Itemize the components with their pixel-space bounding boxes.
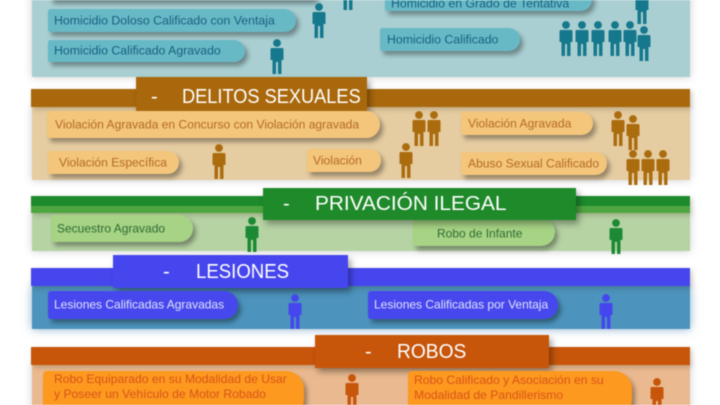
bar: privación ilegal	[31, 196, 690, 213]
heading: robos: -	[365, 340, 372, 362]
pill: Robo de Infante	[413, 218, 555, 246]
bar: lesiones	[31, 268, 690, 286]
pill: Lesiones Calificadas Agravadas	[48, 291, 238, 319]
bar: delitos sexuales	[31, 89, 690, 107]
heading: lesiones: -	[163, 260, 170, 282]
icons: homicidios people	[270, 0, 652, 75]
pill: Robo Calificado: Robo Calificado y Asociación en su	[414, 373, 604, 387]
heading: delitos sexuales: -	[151, 86, 158, 108]
panel: privación ilegal	[32, 212, 690, 251]
pill: Robo Calificado	[408, 371, 632, 405]
pill: Homicidio Calificado	[380, 28, 520, 51]
panel: homicidios	[32, 0, 690, 77]
pill: Violación Agravada en Concurso: Violación Agravada en Concurso con Violación agravada	[55, 117, 359, 131]
pill: Homicidio Calificado Agravado: Homicidio Calificado Agravado	[54, 44, 221, 58]
heading: lesiones: LESIONES	[196, 260, 289, 282]
pill: Violación Agravada: Violación Agravada	[468, 116, 571, 130]
pill: Lesiones Calificadas por Ventaja: Lesiones Calificadas por Ventaja	[374, 298, 548, 312]
pill: Violación: Violación	[313, 153, 362, 167]
pill: Robo Equiparado: Robo Equiparado en su Modalidad de Usar	[54, 372, 287, 386]
pill: Homicidio Doloso Calificado con Ventaja	[48, 9, 296, 32]
pill: Homicidio Doloso Calificado con Ventaja: Homicidio Doloso Calificado con Ventaja	[54, 13, 275, 27]
pill: Homicidio Calificado Agravado	[48, 40, 245, 62]
heading: robos: ROBOS	[397, 340, 466, 362]
pill: Abuso Sexual Calificado	[461, 152, 607, 175]
panel: lesiones	[32, 286, 690, 329]
pill: Abuso Sexual Calificado: Abuso Sexual Calificado	[468, 156, 599, 170]
pill: Secuestro Agravado	[51, 215, 193, 242]
pill: Lesiones Calificadas por Ventaja	[368, 291, 558, 319]
pill: Lesiones Calificadas Agravadas: Lesiones Calificadas Agravadas	[54, 298, 224, 312]
pill: Violación Específica	[48, 151, 179, 174]
icons: delitos sexuales people	[212, 110, 670, 186]
pill: Robo Equiparado: y Poseer un Vehículo de Motor Robado	[54, 387, 266, 401]
pill: Homicidio Calificado: Homicidio Calificado	[387, 32, 498, 46]
icons: robos people	[344, 374, 664, 405]
heading: delitos sexuales	[136, 77, 367, 114]
pill: Violación Agravada	[461, 112, 593, 135]
pill: Secuestro Agravado: Secuestro Agravado	[57, 221, 165, 235]
icons: privación ilegal people	[244, 216, 624, 255]
panel: delitos sexuales	[32, 107, 690, 180]
pill: Robo de Infante: Robo de Infante	[437, 226, 522, 240]
pill: Violación Agravada en Concurso	[47, 111, 380, 138]
pill: Robo Equiparado	[43, 371, 304, 405]
heading: lesiones	[113, 255, 348, 288]
bar: robos	[31, 347, 690, 365]
heading: robos	[315, 335, 549, 368]
panel: robos	[32, 364, 690, 405]
heading: privación ilegal	[263, 188, 576, 220]
heading: privación ilegal: -	[283, 193, 290, 215]
pill: Violación Específica: Violación Específica	[59, 155, 167, 169]
heading: privación ilegal: PRIVACIÓN ILEGAL	[315, 193, 507, 215]
icons: lesiones people	[288, 294, 613, 330]
pill: Robo Calificado: Modalidad de Pandillerismo	[414, 388, 563, 402]
pill: Violación	[307, 149, 381, 172]
heading: delitos sexuales: DELITOS SEXUALES	[182, 86, 361, 108]
